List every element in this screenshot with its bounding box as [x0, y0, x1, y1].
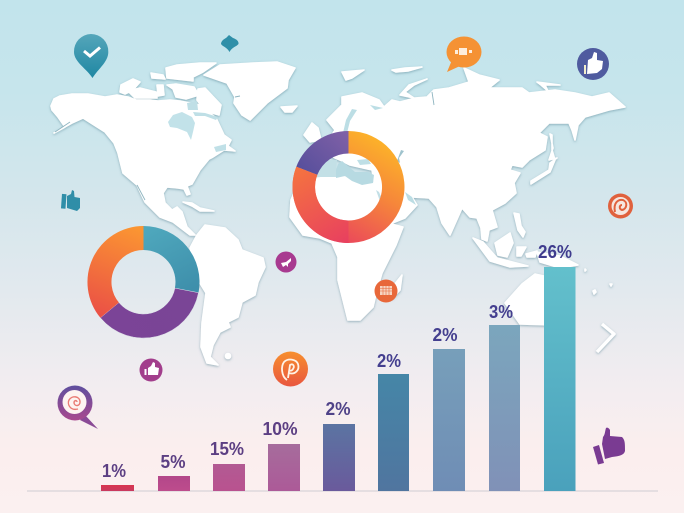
- icon: blue thumb circle: [577, 48, 609, 80]
- Red Sea: [376, 190, 392, 224]
- Cuba and Caribbean: [183, 202, 214, 211]
- donut chart: left: [87, 226, 200, 338]
- Borneo: [495, 233, 513, 257]
- Black Sea: [357, 159, 371, 165]
- Australia: [505, 274, 560, 325]
- Arctic islands: [120, 63, 221, 115]
- Hudson Bay: [168, 112, 195, 140]
- Madagascar: [390, 275, 402, 298]
- icon: check pin: [74, 34, 108, 78]
- map inland water details: [55, 92, 434, 200]
- baseline: [27, 490, 658, 492]
- Svalbard and Russian arctic islands: [342, 67, 560, 98]
- icon: red swirl circle: [608, 194, 633, 218]
- Sumatra and Java: [473, 238, 528, 267]
- donut chart: top over Europe and Africa: [292, 131, 404, 243]
- Atlantic inlet near Iberia: [314, 160, 337, 177]
- Mediterranean: [336, 161, 374, 185]
- Falkland island: [226, 354, 230, 358]
- bar value labels: 2%: [326, 399, 350, 419]
- Caspian: [397, 150, 404, 163]
- Eurasia: [322, 68, 625, 241]
- Pacific islands: [585, 269, 612, 294]
- bar value labels: [102, 242, 572, 481]
- bar value labels: 3%: [489, 302, 513, 322]
- Foxe Basin and Hudson Strait: [187, 101, 218, 120]
- New Guinea: [537, 252, 578, 268]
- world map: [51, 62, 625, 365]
- icon: magenta thumb circle: [140, 358, 162, 382]
- icon: orange P circle: [273, 352, 308, 386]
- South America: [190, 225, 265, 365]
- Baltic and White Sea: [343, 105, 383, 133]
- icon: orange calendar circle: [374, 280, 398, 302]
- bar value labels: 5%: [160, 452, 186, 472]
- inland seas: [168, 101, 416, 224]
- Sulawesi and islands: [517, 247, 537, 257]
- icon: orange speech bubble: [446, 36, 482, 72]
- icon: small teal diamond: [221, 35, 239, 52]
- icon: at-sign location pin: [58, 386, 98, 429]
- bar value labels: 10%: [262, 419, 298, 439]
- bar value labels: 26%: [538, 242, 572, 262]
- bar value labels: 1%: [102, 461, 126, 481]
- icon: teal thumb: [61, 190, 80, 211]
- Iceland: [281, 106, 297, 112]
- bar value labels: 2%: [432, 325, 458, 345]
- UK: [304, 123, 321, 142]
- New Zealand chevron: [597, 324, 614, 352]
- Gulf of St Lawrence: [214, 144, 226, 152]
- Philippines: [514, 213, 525, 237]
- North America: [51, 94, 235, 235]
- bar value labels: 15%: [210, 439, 244, 459]
- Persian Gulf: [405, 192, 416, 205]
- icon: magenta animal circle: [276, 252, 296, 272]
- bar value labels: 2%: [377, 351, 401, 371]
- Sakhalin and Japan: [531, 134, 557, 184]
- Africa: [290, 176, 403, 320]
- icon: purple thumb: [593, 428, 625, 464]
- Greenland: [204, 62, 295, 120]
- bar chart: [101, 267, 576, 491]
